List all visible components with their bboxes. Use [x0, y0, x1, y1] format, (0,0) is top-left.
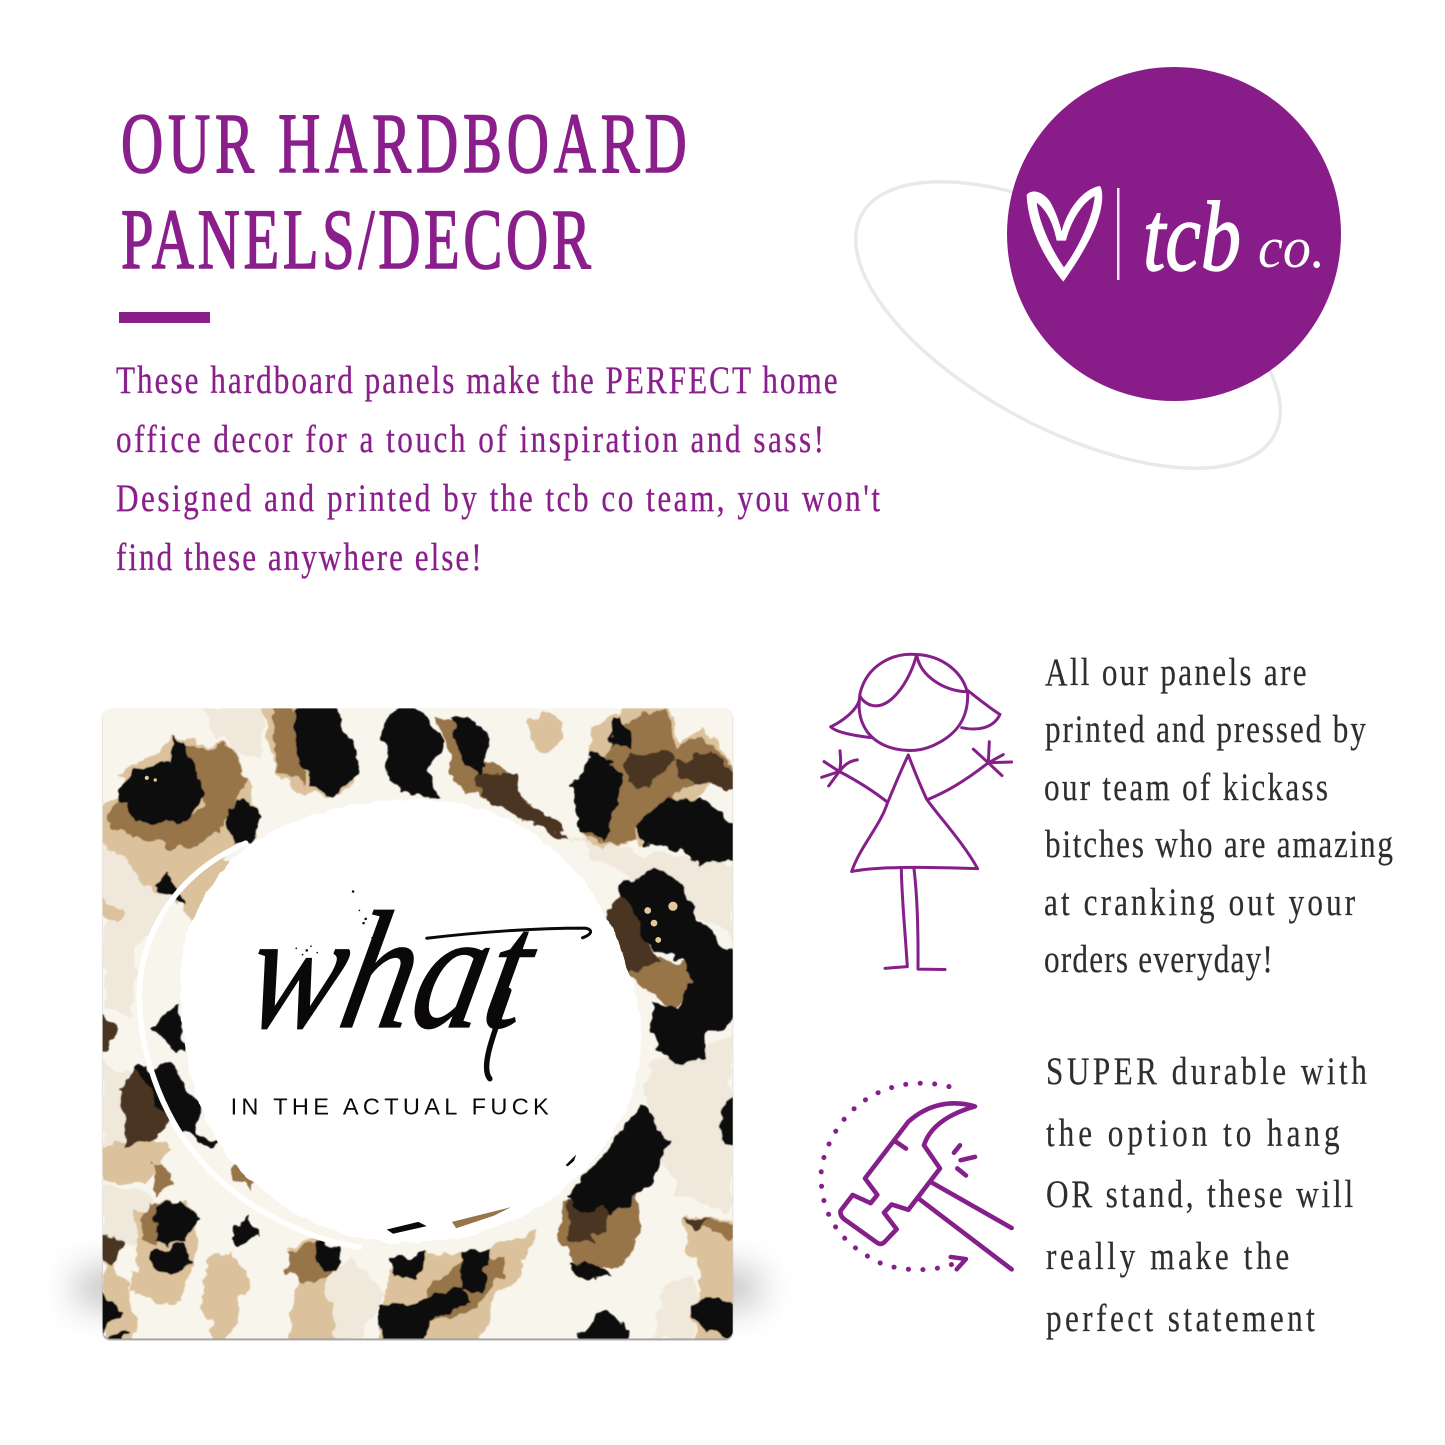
text block: durability: perfect statement [1046, 1297, 1315, 1340]
product panel: leopard print hardboard [94, 702, 738, 1344]
title [121, 95, 687, 287]
decorative orbit ring [813, 123, 1323, 527]
panel shadow backdrop [78, 1272, 758, 1304]
leopard print pattern [94, 702, 738, 1344]
title: PANELS/DECOR [121, 191, 591, 287]
intro text block [116, 359, 880, 579]
text block: durability: really make the [1046, 1235, 1289, 1278]
panel quote text: IN THE ACTUAL FUCK [231, 1094, 549, 1120]
text block: team: orders everyday! [1044, 938, 1273, 981]
title: OUR HARDBOARD [121, 95, 687, 191]
text block: durability: the option to hang [1046, 1112, 1340, 1155]
white brushed circle [180, 800, 641, 1243]
text block: team: our team of kickass [1044, 766, 1328, 809]
text block: durability [1046, 1050, 1367, 1340]
hammer head [840, 1103, 975, 1244]
text block: team: at cranking out your [1044, 881, 1355, 924]
logo divider [1117, 188, 1120, 280]
logo wordmark: co. [1258, 215, 1325, 280]
icon: heart [1027, 186, 1102, 282]
text block: team: bitches who are amazing [1045, 823, 1393, 866]
brush ring stroke [139, 843, 359, 1247]
text block: team: printed and pressed by [1045, 708, 1366, 751]
hammer handle [919, 1183, 1012, 1269]
intro text block: Designed and printed by the tcb co team, you won't [116, 477, 880, 520]
logo wordmark [1143, 181, 1325, 292]
dotted arc [821, 1083, 957, 1270]
panel quote text: what [232, 877, 553, 1064]
intro text block: find these anywhere else! [116, 536, 482, 579]
logo wordmark: tcb [1143, 181, 1241, 292]
text block: durability: OR stand, these will [1046, 1173, 1353, 1216]
intro text block: office decor for a touch of inspiration and sass! [116, 418, 824, 461]
brush flecks [295, 890, 576, 1234]
text block: team [1044, 651, 1393, 981]
impact sparks [954, 1145, 975, 1175]
icon: hammer with dotted arrow [821, 1083, 1012, 1270]
leopard spot flecks [145, 776, 678, 943]
text block: team: All our panels are [1045, 651, 1307, 694]
logo badge [1007, 67, 1341, 401]
heading underline [119, 312, 210, 323]
intro text block: These hardboard panels make the PERFECT home [116, 359, 838, 402]
arrow head [951, 1257, 966, 1269]
text block: durability: SUPER durable with [1046, 1050, 1367, 1093]
icon: stick figure girl [822, 654, 1012, 970]
